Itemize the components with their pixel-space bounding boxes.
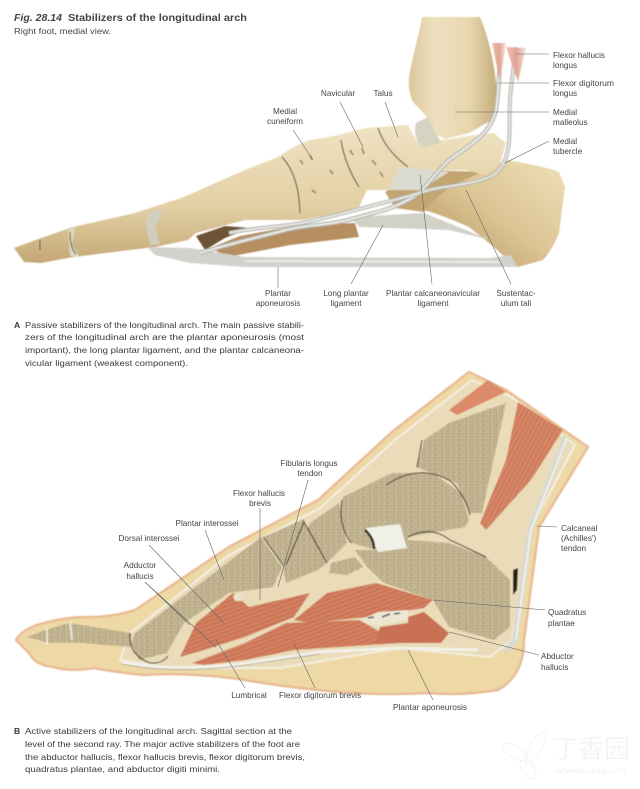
label: Flexor hallucis longus: Flexor hallucis	[553, 51, 605, 60]
label: Plantar aponeurosis: Plantar	[265, 289, 291, 298]
panel A: foot skeleton medial view	[14, 17, 565, 267]
caption A	[14, 320, 305, 368]
phalanges	[27, 623, 131, 647]
interosseous ligament	[366, 524, 407, 552]
tibia	[409, 17, 496, 139]
midfoot and forefoot bones	[14, 125, 506, 263]
label: Abductor hallucis: hallucis	[541, 663, 568, 672]
upper extensor muscle	[449, 380, 506, 415]
label: Long plantar ligament: ligament	[331, 299, 362, 308]
talus	[339, 473, 469, 550]
label: Flexor hallucis longus: longus	[553, 61, 577, 70]
abductor hallucis muscle	[376, 612, 449, 643]
label: Calcaneal (Achilles') tendon: tendon	[561, 544, 586, 553]
label: Quadratus plantae: Quadratus	[548, 608, 586, 617]
label: Navicular: Navicular	[321, 89, 355, 98]
label: Medial malleolus: malleolus	[553, 118, 588, 127]
label: Medial cuneiform: cuneiform	[267, 117, 303, 126]
retrocalcaneal fat pad gap	[513, 568, 518, 595]
caption B	[14, 726, 305, 774]
watermark name: 丁香园	[552, 734, 630, 764]
label: Calcaneal (Achilles') tendon: Calcaneal	[561, 524, 598, 533]
label: Medial cuneiform	[267, 107, 313, 160]
label: Plantar calcaneonavicular ligament: Plantar calcaneonavicular	[386, 289, 480, 298]
label: Abductor hallucis	[449, 632, 574, 672]
calcaneus	[355, 540, 510, 640]
label: Plantar calcaneonavicular ligament: ligament	[418, 299, 449, 308]
caption B: level of the second ray. The major active stabilizers of the foot are	[25, 739, 300, 749]
metatarsal capsule	[146, 209, 163, 245]
label: Sustentaculum tali: Sustentac-	[496, 289, 536, 298]
joint lines	[40, 128, 408, 254]
fascia layer over the dorsum	[120, 380, 575, 668]
skin outline and subcutaneous fat	[16, 372, 588, 694]
caption A: A	[14, 320, 20, 330]
navicular	[306, 503, 347, 563]
label: Navicular	[321, 89, 363, 147]
label: Plantar aponeurosis	[256, 267, 300, 308]
label: Flexor hallucis brevis	[233, 489, 285, 600]
sustentaculum region	[385, 170, 490, 212]
soleus muscle	[480, 402, 563, 530]
label: Plantar aponeurosis B: Plantar aponeurosis	[393, 703, 467, 712]
calcaneus	[424, 160, 565, 267]
watermark url: www.dxy.cn	[552, 766, 626, 775]
label: Talus: Talus	[373, 89, 393, 98]
label: Fibularis longus tendon: Fibularis longus	[280, 459, 338, 468]
subtitle: Right foot, medial view.	[14, 26, 111, 36]
tibia	[416, 403, 506, 513]
panel B: sagittal section of foot	[16, 372, 588, 694]
label: Flexor digitorum longus: Flexor digitorum	[553, 79, 614, 88]
label: Plantar interossei: Plantar interossei	[176, 519, 239, 528]
plantar calcaneonavicular ligament	[388, 167, 449, 190]
muscle bellies	[492, 43, 506, 82]
label: Sustentaculum tali: ulum tali	[501, 299, 531, 308]
quadratus plantae muscle	[294, 583, 433, 623]
icon: watermark flower	[500, 729, 549, 781]
label: Long plantar ligament: Long plantar	[323, 289, 369, 298]
label: Flexor digitorum longus: longus	[553, 89, 577, 98]
label: Lumbrical: Lumbrical	[231, 691, 267, 700]
label: Talus	[373, 89, 398, 137]
caption B: quadratus plantae, and abductor digiti minimi.	[25, 764, 220, 774]
label: Calcaneal (Achilles') tendon	[537, 524, 598, 553]
label: Medial malleolus	[455, 108, 588, 127]
label: Dorsal interossei	[118, 534, 224, 623]
caption B: Active stabilizers of the longitudinal arch. Sagittal section at the	[25, 726, 292, 736]
bone surface pits	[300, 148, 383, 193]
label: Adductor hallucis	[124, 561, 216, 647]
label: Quadratus plantae	[433, 600, 586, 628]
label: Long plantar ligament	[323, 225, 383, 308]
Achilles tendon	[505, 436, 566, 652]
metatarsal	[131, 537, 282, 660]
label: Plantar calcaneonavicular ligament	[386, 175, 480, 308]
label: Flexor digitorum longus	[498, 79, 614, 98]
caption A: Passive stabilizers of the longitudinal arch. The main passive stabili-	[25, 320, 304, 330]
watermark	[500, 729, 630, 781]
label: Flexor hallucis brevis: brevis	[249, 499, 271, 508]
label: Medial tubercle	[505, 137, 583, 163]
tendon of flexor hallucis longus	[200, 43, 500, 253]
label: Fibularis longus tendon: tendon	[297, 469, 323, 478]
caption A: vicular ligament (weakest component).	[25, 358, 188, 368]
plantar aponeurosis	[122, 648, 478, 668]
adductor hallucis muscle	[180, 593, 310, 657]
label: Adductor hallucis: Adductor	[124, 561, 157, 570]
label: Quadratus plantae: plantae	[548, 619, 575, 628]
caption B: the abductor hallucis, flexor hallucis brevis, flexor digitorum brevis,	[25, 752, 305, 762]
label: Lumbrical	[216, 640, 267, 700]
caption B: B	[14, 726, 20, 736]
label: Medial tubercle: Medial	[553, 137, 577, 146]
title: Stabilizers of the longitudinal arch	[68, 12, 247, 24]
label: Flexor digitorum brevis	[279, 643, 361, 700]
label: Sustentaculum tali	[466, 190, 536, 308]
flexor digitorum brevis muscle stump	[210, 223, 359, 257]
caption A: zers of the longitudinal arch are the plantar aponeurosis (most	[25, 332, 305, 342]
label: Flexor digitorum brevis: Flexor digitorum brevis	[279, 691, 361, 700]
plantar aponeurosis	[147, 247, 518, 267]
title: Fig. 28.14	[14, 12, 62, 24]
label: Medial tubercle: tubercle	[553, 147, 583, 156]
label: Medial malleolus: Medial	[553, 108, 577, 117]
flexor digitorum brevis muscle	[192, 620, 400, 665]
label: Abductor hallucis: Abductor	[541, 652, 574, 661]
joint lines	[130, 440, 486, 663]
label: Medial cuneiform: Medial	[273, 107, 297, 116]
plantar vessels and fat	[360, 610, 408, 626]
caption A: important), the long plantar ligament, and the plantar calcaneona-	[25, 345, 304, 355]
label: Plantar aponeurosis B	[393, 650, 467, 712]
tendon of flexor digitorum longus	[229, 47, 516, 233]
label: Dorsal interossei: Dorsal interossei	[118, 534, 180, 543]
label: Flexor hallucis brevis: Flexor hallucis	[233, 489, 285, 498]
label: Flexor hallucis longus	[516, 51, 605, 70]
label: Adductor hallucis: hallucis	[126, 572, 154, 581]
medial cuneiform	[263, 520, 327, 583]
label: Plantar interossei	[176, 519, 239, 580]
label: Calcaneal (Achilles') tendon: (Achilles')	[561, 534, 597, 543]
cuboid	[329, 557, 363, 575]
label: Plantar aponeurosis: aponeurosis	[256, 299, 300, 308]
long plantar ligament	[351, 213, 490, 240]
label: Fibularis longus tendon	[278, 459, 338, 587]
dark space between metatarsal tendons	[196, 226, 250, 250]
talar trochlea	[415, 117, 441, 148]
